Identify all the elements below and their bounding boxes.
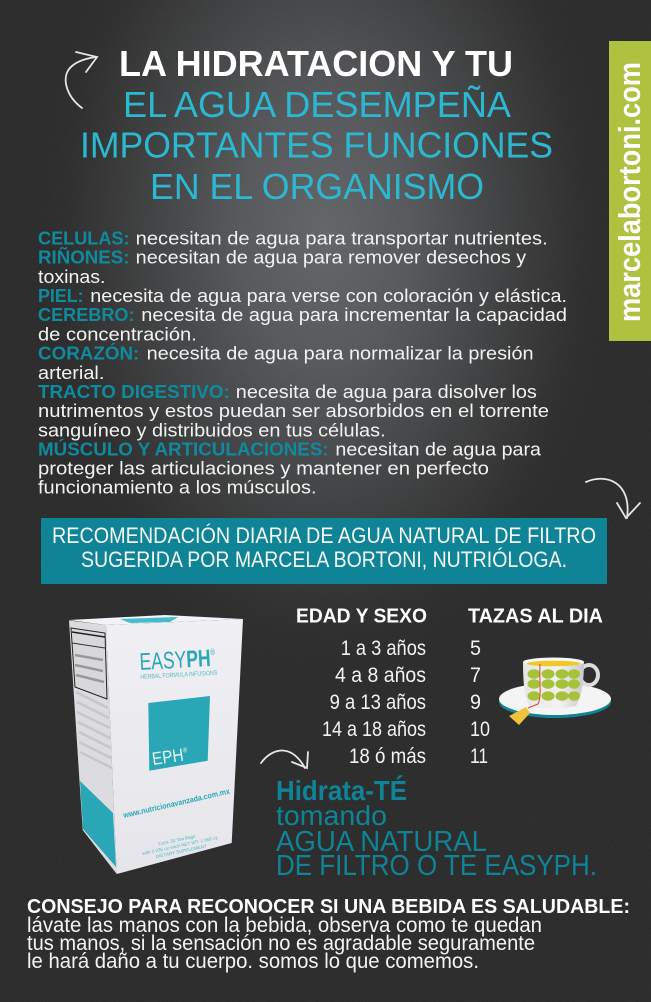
- EPH text: EPH: [151, 744, 190, 769]
- row 1: 1 a 3 años: [341, 636, 426, 660]
- celulas: CELULAS:: [38, 228, 130, 248]
- contents text: DIETARY SUPPLEMENT: [155, 843, 207, 859]
- corazon: [38, 343, 534, 383]
- row 2: 7: [470, 663, 481, 687]
- advice line 2: tus manos, si la sensación no es agradable seguramente: [27, 932, 535, 955]
- advice line 3: le hará daño a tu cuerpo. somos lo que comemos.: [27, 950, 479, 973]
- riñones: necesitan de agua para remover desechos y: [136, 247, 527, 268]
- brand logo: HERBAL FORMULA INFUSIONS: [140, 670, 218, 681]
- call to action: hidrata-te: Hidrata-TÉ: [276, 775, 407, 806]
- corazon: arterial.: [38, 362, 104, 383]
- subtitle line 2: IMPORTANTES FUNCIONES: [80, 124, 553, 166]
- arrow: right curved arrow: [586, 479, 640, 518]
- title: [80, 43, 553, 207]
- tea tag: [509, 707, 530, 725]
- box top face: [69, 615, 243, 625]
- subtitle line 1: EL AGUA DESEMPEÑA: [123, 84, 511, 125]
- piel: necesita de agua para verse con coloración y elástica.: [90, 285, 567, 306]
- tracto digestivo: sanguíneo y distribuidos en tus células.: [38, 419, 386, 440]
- riñones: [38, 247, 527, 287]
- row 3: 9 a 13 años: [330, 690, 426, 714]
- riñones: toxinas.: [38, 266, 106, 287]
- row 4: 14 a 18 años: [322, 717, 426, 741]
- banner: daily recommendation: SUGERIDA POR MARCELA BORTONI, NUTRIÓLOGA.: [81, 547, 567, 572]
- musculo y articulaciones: [38, 438, 542, 498]
- piel: PIEL:: [38, 285, 84, 306]
- tea string: [528, 664, 540, 708]
- table: water by age: [296, 606, 603, 768]
- musculo y articulaciones: funcionamiento a los músculos.: [38, 477, 316, 498]
- row 5: 18 ó más: [349, 744, 426, 768]
- url text: www.nutricionavanzada.com.mx: [122, 787, 231, 820]
- musculo y articulaciones: MÚSCULO Y ARTICULACIONES:: [38, 438, 329, 460]
- arrow: top curved arrow: [66, 52, 97, 108]
- contents text: with 0.035 oz each NET WT. 1.058 oz: [142, 835, 219, 856]
- tracto digestivo: TRACTO DIGESTIVO:: [38, 381, 230, 402]
- cerebro: CEREBRO:: [38, 304, 134, 325]
- EPH text: ®: [182, 746, 189, 755]
- banner: daily recommendation: [41, 518, 607, 584]
- text block: organ functions: [38, 228, 567, 498]
- contents text: [141, 829, 220, 862]
- corazon: necesita de agua para normalizar la presión: [147, 343, 534, 364]
- teal square: [148, 696, 210, 771]
- tracto digestivo: necesita de agua para disolver los: [236, 381, 537, 402]
- subtitle line 3: EN EL ORGANISMO: [150, 166, 484, 207]
- cerebro: [38, 304, 567, 344]
- cerebro: de concentración.: [38, 323, 197, 344]
- icon: tea cup: [499, 658, 611, 725]
- call to action: hidrata-te: DE FILTRO O TE EASYPH.: [276, 850, 597, 882]
- advice heading: CONSEJO PARA RECONOCER SI UNA BEBIDA ES SALUDABLE:: [27, 896, 630, 918]
- column header: age: EDAD Y SEXO: [296, 606, 427, 628]
- corazon: CORAZÓN:: [38, 343, 139, 364]
- saucer: [499, 686, 611, 718]
- advice line 1: lávate las manos con la bebida, observa como te quedan: [27, 914, 542, 937]
- contents text: Cont. 30 Tea Bags: [158, 834, 197, 846]
- call to action: hidrata-te: tomando: [276, 800, 387, 831]
- advice text block: [27, 896, 630, 973]
- brand logo: EASYPH: [139, 645, 220, 676]
- banner: daily recommendation: RECOMENDACIÓN DIARIA DE AGUA NATURAL DE FILTRO: [52, 523, 596, 548]
- celulas: necesitan de agua para transportar nutrientes.: [136, 228, 548, 248]
- tracto digestivo: nutrimentos y estos puedan ser absorbidos en el torrente: [38, 400, 549, 421]
- cerebro: necesita de agua para incrementar la capacidad: [141, 304, 567, 325]
- cup body: [523, 662, 584, 708]
- row 1: 5: [470, 636, 481, 660]
- arrow: lower curved arrow: [261, 750, 308, 768]
- musculo y articulaciones: proteger las articulaciones y mantener en perfecto: [38, 458, 489, 479]
- product box: EasyPH: [69, 615, 243, 874]
- leaf pattern: [528, 669, 580, 701]
- row 3: 9: [470, 690, 481, 714]
- row 2: 4 a 8 años: [335, 663, 426, 687]
- nutrition label: [71, 628, 107, 699]
- column header: cups: TAZAS AL DIA: [468, 606, 603, 628]
- tracto digestivo: [38, 381, 549, 440]
- brand logo: ®: [210, 647, 216, 657]
- box side face: [69, 620, 117, 874]
- handle: [580, 665, 598, 685]
- call to action: hidrata-te: AGUA NATURAL: [276, 826, 487, 858]
- riñones: RIÑONES:: [38, 247, 130, 268]
- row 4: 10: [470, 717, 490, 741]
- row 2: [335, 663, 481, 687]
- title line: la hidratacion: LA HIDRATACION Y TU: [119, 43, 513, 84]
- row 5: 11: [470, 744, 488, 768]
- row 5: [349, 744, 488, 768]
- side banner: website: marcelabortoni.com: [612, 62, 647, 322]
- call to action: hidrata-te: [276, 775, 597, 882]
- musculo y articulaciones: necesitan de agua para: [335, 438, 542, 460]
- box front face: [106, 619, 243, 874]
